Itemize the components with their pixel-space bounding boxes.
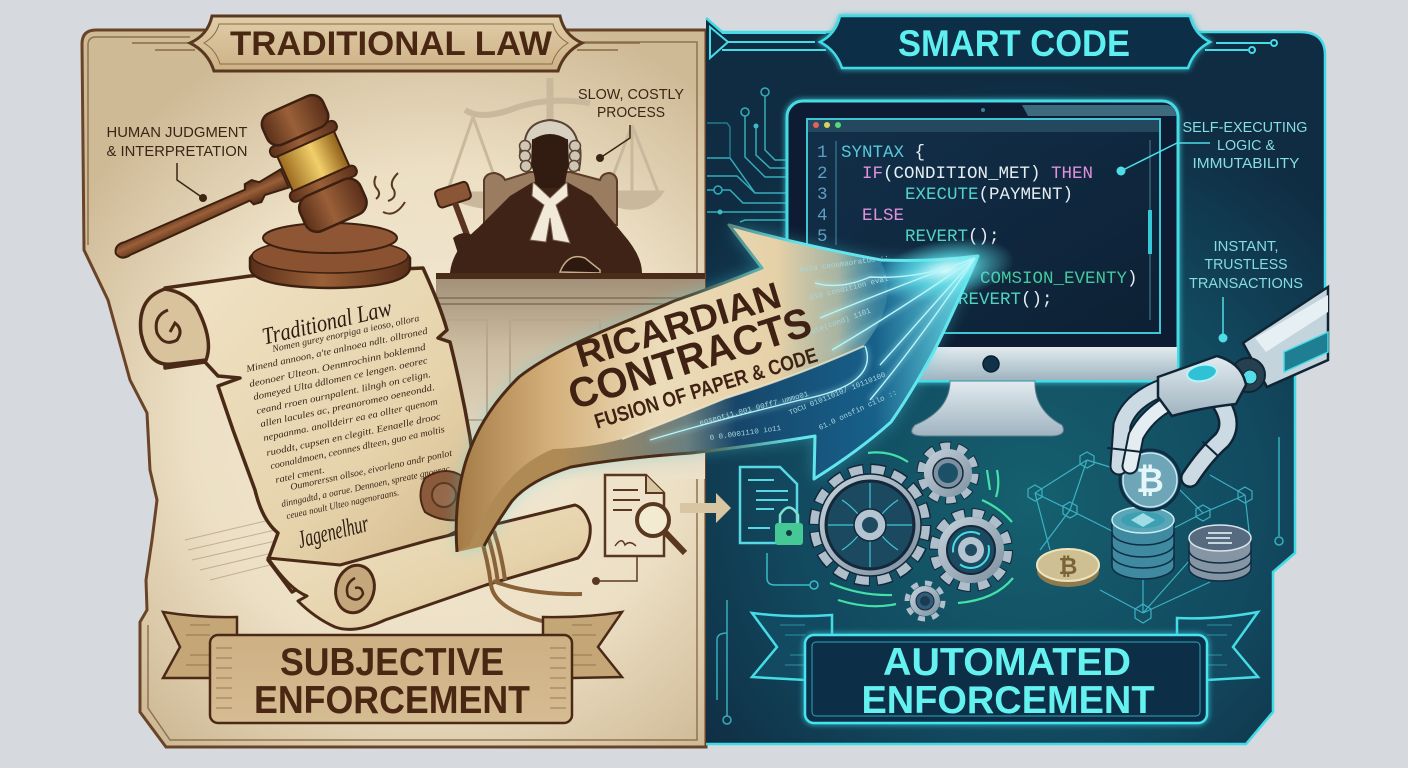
judge face [531,134,569,188]
scroll body text: deonoer Ulteon. Oenmrochinn boklemnd [249,343,427,390]
banner: subjective enforcement [163,612,622,723]
robot wrist [1231,358,1265,392]
line numbers: 3 [817,185,828,205]
background scales of justice [445,78,662,208]
signature: Jagenelhur [295,510,371,554]
coin: bitcoin held by hand: ₿ [1136,462,1164,500]
monitor [787,101,1178,436]
panel: smart code [706,18,1325,744]
line numbers: 4 [817,206,828,226]
sounding block [250,223,410,288]
scroll title: Traditional Law [260,295,394,351]
code lines: COMSION_EVENTY) [980,269,1138,289]
judge robe [450,182,642,273]
arrow tip glow [871,228,1019,312]
banner: subjective enforcement: SUBJECTIVE [280,641,504,684]
judge wig [520,120,581,172]
label: instant trustless transactions [1189,238,1303,342]
judge collar and jabot [530,182,570,243]
scroll body text: ruoddt, cupsen en clegitt. Eenaelle drooc [266,412,443,459]
scroll body text: dinngadtd, a oarue. Dennoen, spreate gnoorac [281,464,452,510]
label: instant trustless transactions: TRANSACTIONS [1189,275,1303,292]
coin: gold bitcoin [1037,549,1099,587]
rope tie [480,531,582,622]
arrow: paper to code [680,493,731,523]
label: human judgment: & INTERPRETATION [106,143,248,160]
monitor chin [789,347,1177,380]
scroll body text: ceuea noult Ulteo nagenoraans. [286,488,400,522]
coin: bitcoin held by hand [1120,450,1180,510]
code lines: REVERT(); [905,227,1000,247]
scroll body text: domeyed Ulta ddlomen ce lengen. oeorec [253,356,430,403]
robot palm [1158,356,1246,416]
scroll body text: allen lacules ac, preanoromeo oeneondd. [260,383,436,430]
heading: smart code: SMART CODE [898,23,1130,64]
central arrow: ricardian contracts [456,225,1019,552]
arrow paper face [456,225,888,552]
arrow code fragments: 0 0.0001110 io11 [709,425,782,443]
label: instant trustless transactions: INSTANT, [1214,238,1278,255]
code lines [841,143,1138,310]
scroll body text: Oumorerssn ollsoe, eivorleno andr ponlot [290,449,453,493]
scroll body text: ratel cment. [275,466,326,486]
coin stack: center [1112,507,1174,579]
banner: automated enforcement: AUTOMATED [883,641,1131,684]
banner: subjective enforcement: ENFORCEMENT [254,679,530,722]
parchment scroll [140,268,480,592]
scroll body text: Nomen gurey enorpiga a ieoso, ollora [271,314,421,355]
arrow code fragments: TOCU 01011010/ 10110100 [788,371,888,418]
gear: right [934,513,1008,587]
scroll body text: ceand rroen ournpalent. lilngh on celign. [256,370,432,417]
label: slow costly process: SLOW, COSTLY [578,86,684,103]
icon: document with magnifier [592,475,685,585]
label: self-executing logic: SELF-EXECUTING [1182,119,1308,136]
code lines: SYNTAX { [841,143,925,163]
code lines: IF(CONDITION_MET) THEN [862,164,1093,184]
gear: top [921,446,975,500]
scroll body text [244,314,453,522]
icon: document with lock [740,467,818,589]
wax seal [420,471,466,520]
label: human judgment [106,124,248,202]
label: self-executing logic: LOGIC & [1217,137,1275,154]
line numbers [817,143,828,247]
heading: traditional law: TRADITIONAL LAW [230,25,553,63]
coin stack: right [1189,525,1251,581]
label: self-executing logic: IMMUTABILITY [1192,155,1300,172]
gear motion arrows [830,452,1013,606]
line numbers: 2 [817,164,828,184]
label: slow costly process: PROCESS [597,104,665,121]
code lines: ELSE [862,206,904,226]
judge chair [484,172,617,225]
scroll body text: Minend annoon, a'te anlnoea ndlt. olltroned [244,327,429,375]
banner: automated enforcement [752,612,1258,723]
label: slow costly process [578,86,684,162]
coin: gold bitcoin: ₿ [1059,553,1077,579]
banner: automated enforcement: ENFORCEMENT [862,679,1155,722]
gear: small bottom [907,583,943,619]
arrow subtitle: FUSION OF PAPER & CODE [592,344,820,434]
blockchain network [1028,452,1252,623]
judge bench [430,273,705,479]
arrow outline [456,225,978,552]
arrow light streaks [650,258,975,440]
robot arm [1108,287,1328,478]
window buttons [813,122,841,128]
label: self-executing logic [1116,119,1308,176]
arrow code fragments [699,255,899,443]
code lines: EXECUTE(PAYMENT) [905,185,1073,205]
arrow title: RICARDIAN [571,274,786,376]
label: instant trustless transactions: TRUSTLESS [1204,256,1288,273]
panel: traditional law [82,30,706,747]
scroll top roll [140,289,208,364]
arrow code fragments: 0x2a cooumaoratuc :: [799,255,890,275]
robot fingers [1108,385,1228,478]
arrow title second line: CONTRACTS [562,298,817,418]
heading: smart code [710,16,1277,68]
label: human judgment: HUMAN JUDGMENT [106,124,248,141]
impact marks [374,173,405,214]
icon: judge gavel [434,181,480,266]
arrow code fragments: 61.0 onsfin cilo :: [818,389,899,433]
gear: large circuit gear [815,470,925,580]
line numbers: 1 [817,143,828,163]
monitor stand [912,381,1064,436]
heading: traditional law [132,16,640,71]
code lines: REVERT(); [958,290,1053,310]
judge hand [560,257,600,273]
code screen [807,119,1160,333]
line numbers: 5 [817,227,828,247]
judge silhouette [434,120,642,273]
rolled scroll end [268,505,590,629]
arrow code fragments: 010 condition eval [809,275,890,303]
arrow code fragments: execute(cond) 1101 [793,307,873,343]
gavel [89,90,374,311]
scroll body text: coonaldmoen, ceonnes dlteen, guo ea moltis [270,425,446,472]
arrow code fragments: eoseoti1.001_00ff7 ummo01 [699,391,810,428]
scroll body text: nepaanma. anolldeirr ea ea ollter quenom [263,397,439,444]
